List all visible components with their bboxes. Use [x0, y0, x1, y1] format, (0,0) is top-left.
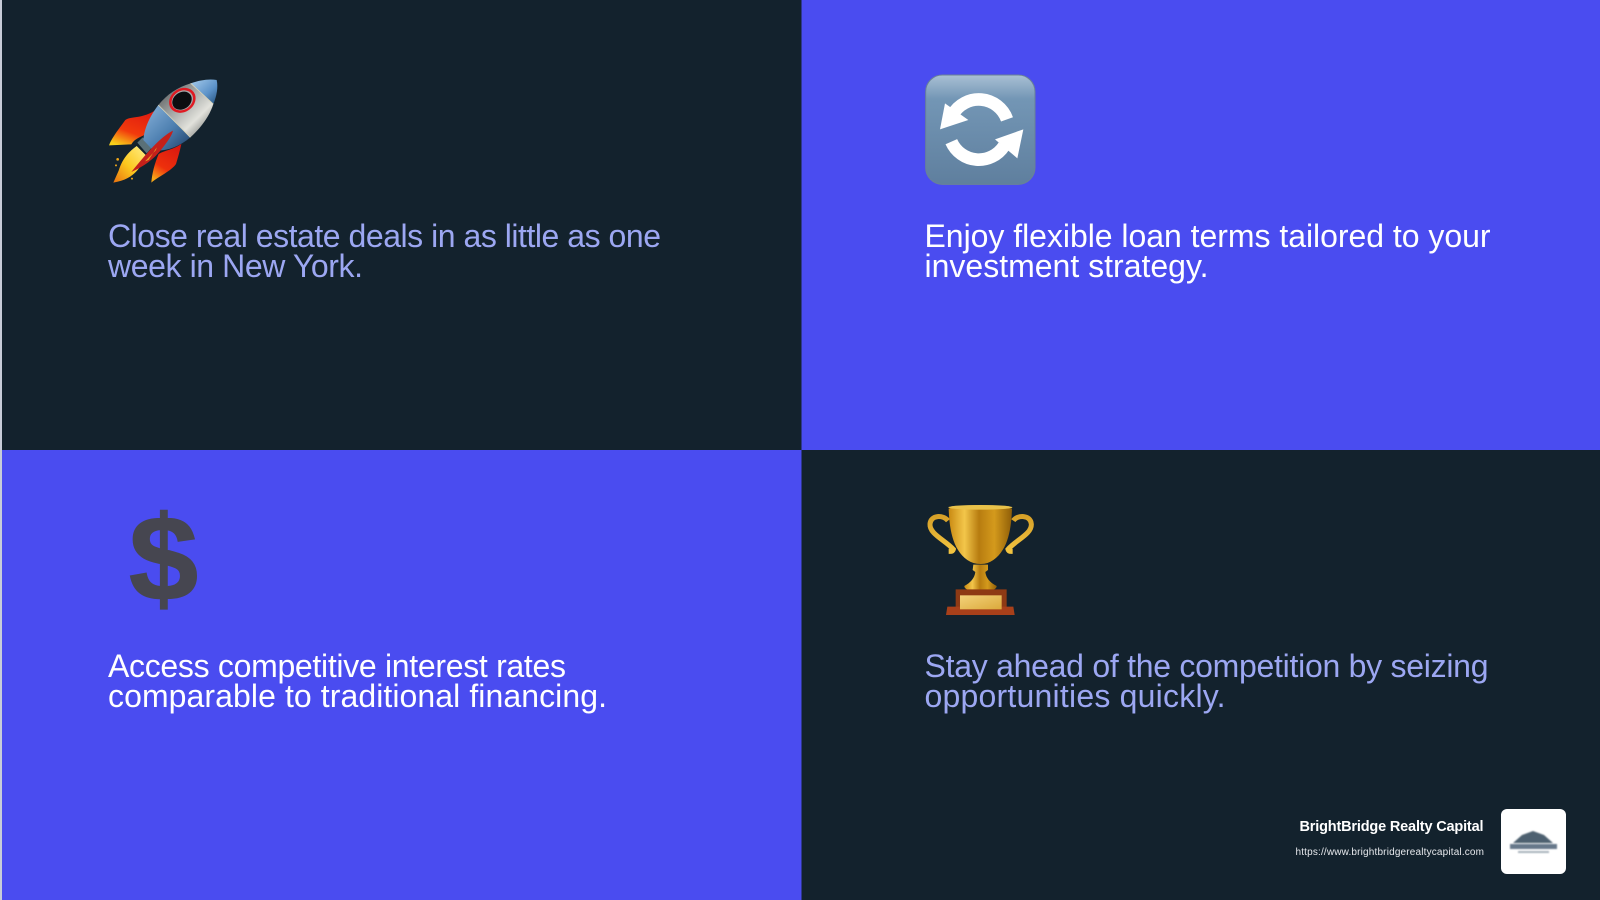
text: bottom right	[924, 648, 1488, 714]
panel: bottom right dark	[802, 450, 1600, 900]
icon: rocket	[109, 79, 217, 183]
icon: trophy	[930, 505, 1031, 615]
text: bottom left: Access competitive interest rates	[108, 648, 566, 684]
text: top right: investment strategy.	[924, 248, 1208, 284]
logo tile	[1501, 809, 1566, 874]
text: bottom left: comparable to traditional financing.	[108, 678, 607, 714]
text: top left: week in New York.	[107, 248, 363, 284]
text: bottom right: Stay ahead of the competition by seizing	[924, 648, 1488, 684]
text: top left: Close real estate deals in as little as one	[108, 218, 661, 254]
text: top left	[107, 218, 661, 284]
text: top right: Enjoy flexible loan terms tailored to your	[924, 218, 1491, 254]
text: bottom right: opportunities quickly.	[924, 678, 1226, 714]
brand name: BrightBridge Realty Capital	[1300, 819, 1484, 835]
brand url: https://www.brightbridgerealtycapital.com	[1296, 847, 1484, 858]
panel: top right blue	[802, 0, 1600, 450]
text: bottom left	[108, 648, 607, 714]
text: top right	[924, 218, 1491, 284]
panel: top left dark	[2, 0, 802, 450]
icon: dollar sign: $	[129, 492, 198, 627]
icon: sync arrows	[926, 75, 1035, 184]
panel: bottom left blue	[2, 450, 802, 900]
